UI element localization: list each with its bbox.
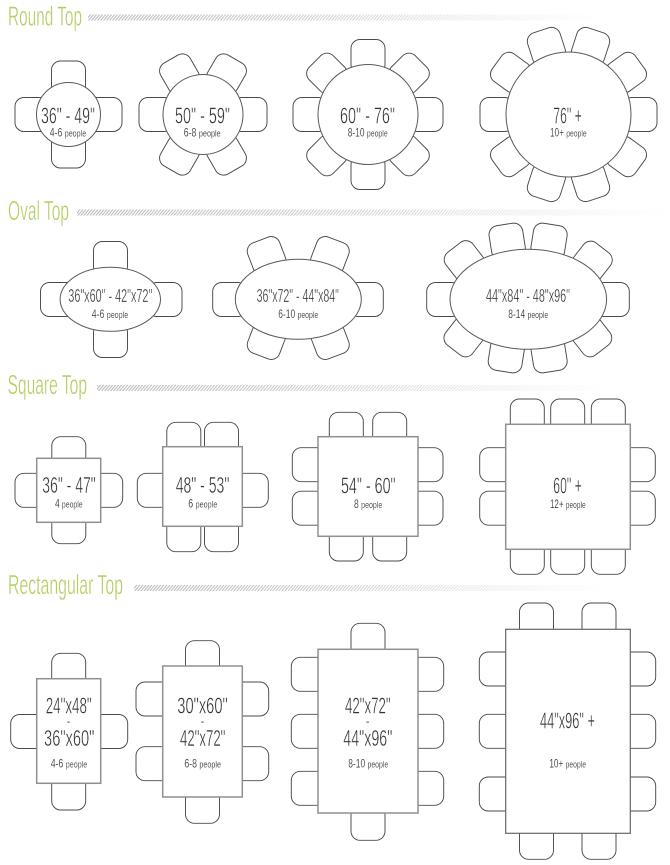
table: rectangle 42x72-44x96: 42"x72" [345,692,391,718]
table: oval 44x84-48x96: 44"x84" - 48"x96" [486,285,570,306]
hatched rule: square top [97,384,606,392]
heading: Rectangular Top: Rectangular Top [8,569,123,600]
table: round 36-49 [15,61,122,168]
table: rectangle 24x48-36x60 [11,653,128,810]
table: square 60+: 60" + [553,472,582,498]
table: rectangle 42x72-44x96: - [366,716,370,728]
table: round 60-76 [293,40,443,190]
heading: Square Top: Square Top [8,369,87,400]
table: round 60-76: 8-10 people [348,128,388,140]
table: square 60+: 12+ people [550,499,586,511]
table: square 60+ [480,399,655,574]
table: square 54-60: 8 people [354,499,382,511]
table: round 36-49: 36" - 49" [41,102,95,128]
table: square 48-53: 48" - 53" [176,472,229,498]
table: oval 44x84-48x96 [427,222,629,374]
table: square 48-53 [137,422,268,552]
table: rectangle 44x96+ [479,603,656,859]
hatched rule: rectangular top [134,584,605,592]
table: rectangle 42x72-44x96: 44"x96" [343,725,392,751]
panel: rectangular top [8,569,656,859]
table: oval 36x72-44x84: 36"x72" - 44"x84" [257,285,339,306]
table: oval 36x72-44x84: 6-10 people [278,309,318,321]
table: round 50-59: 50" - 59" [175,102,230,128]
table: square 54-60: 54" - 60" [341,472,396,498]
table: square 36-47: 36" - 47" [42,472,96,498]
table: rectangle 30x60-42x72: - [201,716,205,728]
table: rectangle 24x48-36x60: 36"x60" [44,725,94,751]
table: rectangle 24x48-36x60: - [67,716,71,728]
table: rectangle 44x96+: 44"x96" + [540,708,595,734]
table: rectangle 42x72-44x96 [291,623,444,840]
table: round 60-76: 60" - 76" [340,102,395,128]
table: rectangle 24x48-36x60: 24"x48" [46,692,92,718]
table: rectangle 30x60-42x72: 42"x72" [180,725,225,751]
table: oval 36x72-44x84 [213,234,383,362]
table: oval 36x60-42x72: 4-6 people [92,309,128,321]
table: oval 36x60-42x72: 36"x60" - 42"x72" [68,285,152,306]
hatched rule: round top [88,14,601,21]
table: round 36-49: 4-6 people [50,128,86,140]
table: oval 36x60-42x72 [40,242,182,358]
table: square 36-47 [15,437,123,544]
table: round 50-59 [139,51,267,178]
heading: Oval Top: Oval Top [8,195,69,226]
panel: square top [8,369,655,574]
table: square 54-60 [292,412,443,561]
heading: Round Top: Round Top [8,0,82,32]
table: oval 44x84-48x96: 8-14 people [508,309,548,321]
table: round 76+: 76" + [553,102,582,128]
table: rectangle 30x60-42x72: 30"x60" [177,692,228,718]
table: round 76+: 10+ people [550,128,587,140]
table: round 76+ [480,25,657,204]
hatched rule: oval top [77,209,670,216]
table: rectangle 30x60-42x72: 6-8 people [184,758,221,770]
panel: round top [8,0,657,204]
table: square 36-47: 4 people [55,498,83,510]
table: rectangle 44x96+: 10+ people [549,758,586,770]
table: round 50-59: 6-8 people [184,128,221,140]
table: square 48-53: 6 people [188,498,217,510]
table: rectangle 30x60-42x72 [136,641,269,823]
table: rectangle 24x48-36x60: 4-6 people [51,758,87,770]
table: rectangle 42x72-44x96: 8-10 people [348,758,388,770]
panel: oval top [8,195,670,374]
